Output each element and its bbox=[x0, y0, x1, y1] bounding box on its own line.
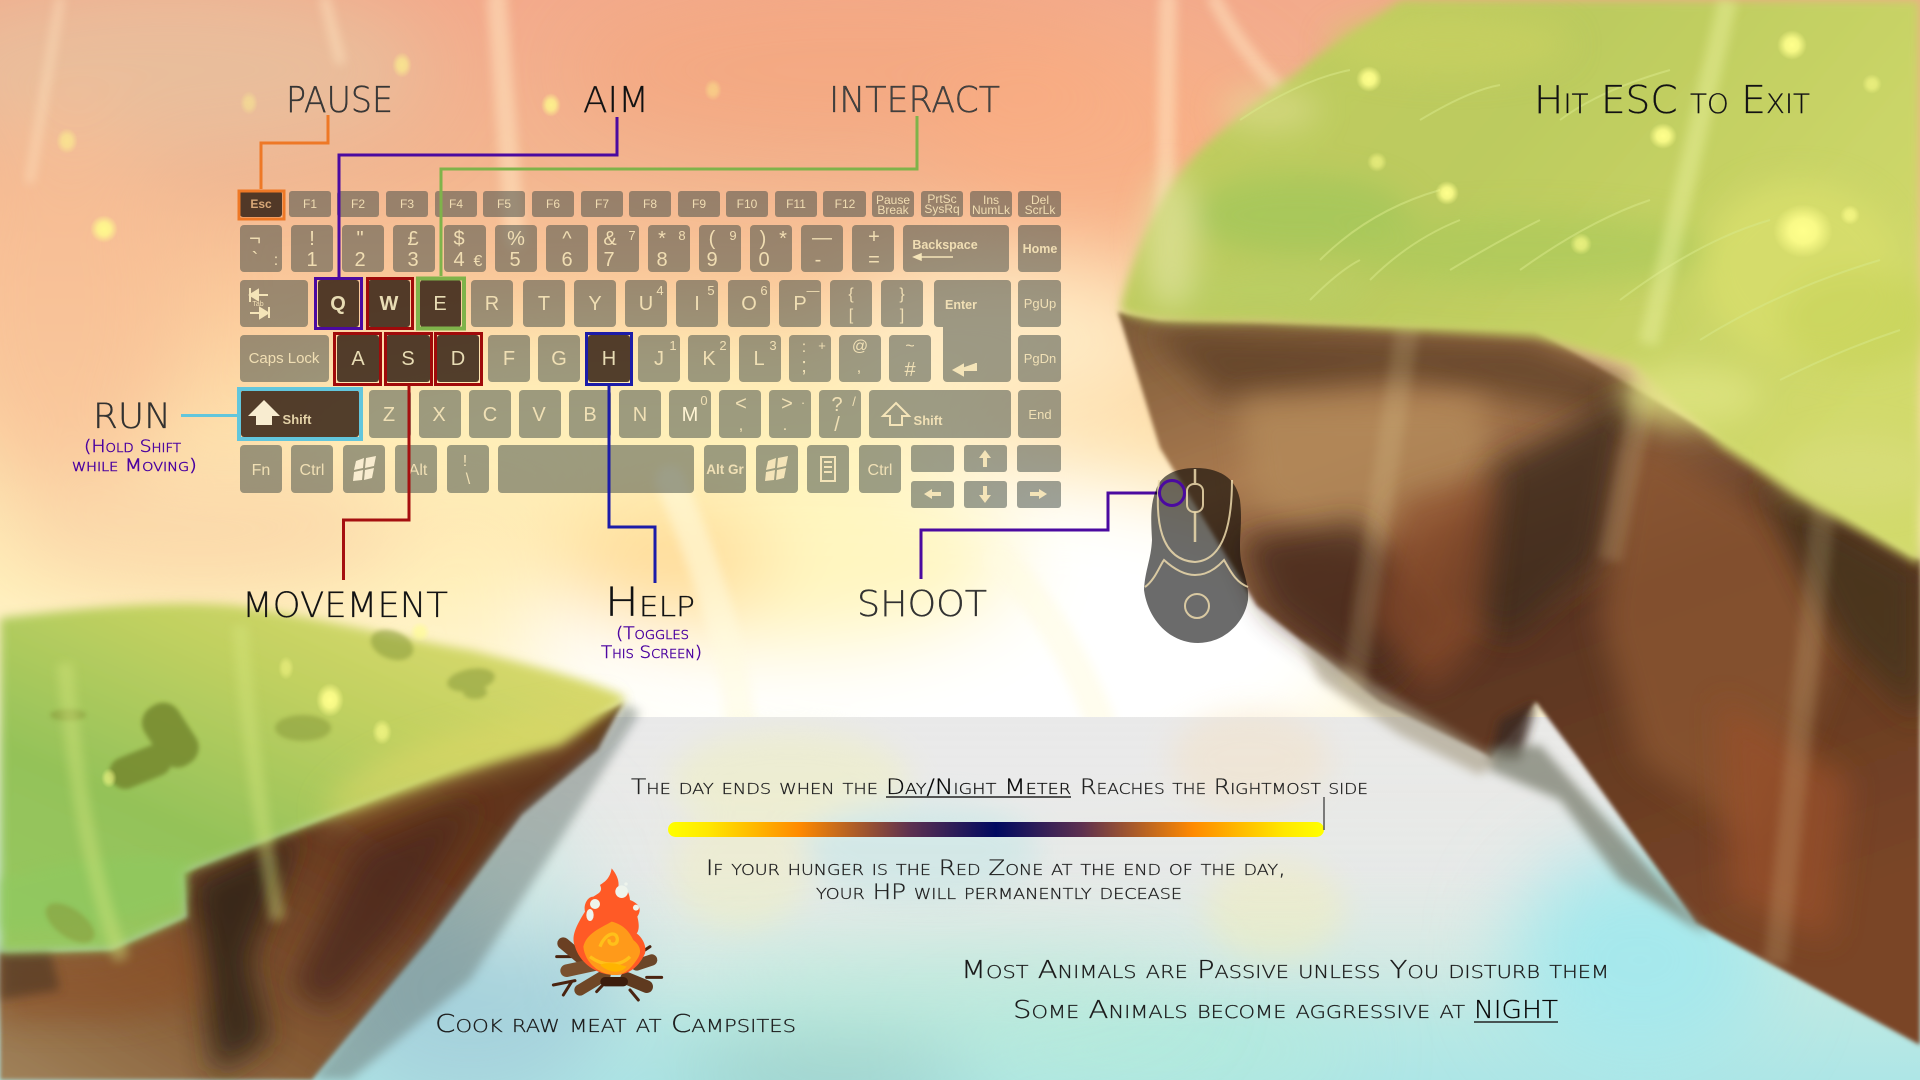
text: day ends line: Reaches the Rightmost side bbox=[1080, 775, 1368, 799]
number key row: : bbox=[274, 252, 278, 269]
QWERTY key row: [ bbox=[849, 307, 854, 324]
ZXCV key row: 0 bbox=[700, 393, 708, 408]
number key row: " bbox=[356, 228, 364, 250]
number key row: Home bbox=[1023, 242, 1057, 256]
ZXCV key row: V bbox=[532, 404, 546, 426]
QWERTY key row: 5 bbox=[707, 283, 715, 298]
label: run note: while Moving) bbox=[72, 456, 197, 476]
connector: movement bbox=[344, 385, 409, 580]
ZXCV key row: . bbox=[783, 417, 787, 434]
ASDF key row: Caps Lock bbox=[249, 350, 320, 367]
function key row: F9 bbox=[692, 197, 706, 211]
QWERTY key row: R bbox=[485, 293, 499, 315]
label: exit hint: Hit ESC to Exit bbox=[1534, 78, 1810, 122]
function key row: PrtSc bbox=[927, 192, 957, 206]
label: run note: (Hold Shift bbox=[84, 437, 182, 457]
ZXCV key row: End bbox=[1028, 407, 1052, 422]
ASDF key row: D bbox=[451, 348, 465, 370]
bottom key row: Fn bbox=[252, 462, 270, 479]
number key row: 4 bbox=[453, 249, 465, 271]
QWERTY key row: 6 bbox=[760, 283, 768, 298]
number key row: % bbox=[507, 228, 525, 250]
highlight: W bbox=[368, 278, 412, 328]
ASDF key row: PgDn bbox=[1024, 351, 1056, 366]
number key row: 3 bbox=[407, 249, 419, 271]
number key row: 7 bbox=[628, 228, 636, 243]
highlight: E bbox=[418, 278, 464, 328]
ASDF key row: 3 bbox=[769, 338, 777, 353]
label: help: Help bbox=[605, 580, 695, 626]
QWERTY key row: PgUp bbox=[1024, 296, 1056, 311]
number key row bbox=[240, 225, 1061, 272]
number key row: * bbox=[658, 228, 666, 250]
ASDF key row: K bbox=[702, 348, 716, 370]
text: animals: Some Animals become aggressive at bbox=[1013, 995, 1465, 1024]
label: interact: INTERACT bbox=[829, 80, 1000, 121]
function key row: F8 bbox=[643, 197, 657, 211]
number key row: 9 bbox=[706, 249, 718, 271]
number key row: + bbox=[868, 226, 880, 248]
bottom key row: Ctrl bbox=[300, 462, 324, 479]
QWERTY key row: — bbox=[806, 283, 820, 298]
function key row: F12 bbox=[835, 197, 856, 211]
function key row: Esc bbox=[250, 197, 272, 211]
text: day ends line: The day ends when the bbox=[631, 775, 878, 799]
highlight: Esc bbox=[239, 191, 284, 219]
bottom key row: Alt Gr bbox=[706, 462, 744, 477]
QWERTY key row: Enter bbox=[945, 298, 977, 312]
number key row: ¬ bbox=[249, 228, 261, 250]
number key row: * bbox=[779, 228, 787, 250]
number key row: & bbox=[603, 228, 617, 250]
function key row: ScrLk bbox=[1025, 203, 1056, 217]
left island cliff bbox=[0, 703, 640, 1080]
connector: aim bbox=[339, 117, 617, 277]
bottom key row: Alt bbox=[409, 462, 428, 479]
number key row: ! bbox=[309, 228, 315, 250]
water tints over panel edges bbox=[320, 810, 1770, 1080]
pale tints in panel bbox=[670, 710, 1345, 960]
function key row: Break bbox=[877, 203, 910, 217]
ASDF key row: G bbox=[551, 348, 567, 370]
bottom key row: Ctrl bbox=[868, 462, 892, 479]
ZXCV key row: < bbox=[735, 393, 747, 415]
number key row: ) bbox=[760, 228, 766, 250]
fireflies bbox=[56, 30, 1882, 788]
keyboard bbox=[240, 191, 1061, 508]
ASDF key row: H bbox=[602, 348, 616, 370]
icon: mouse bbox=[1144, 468, 1248, 643]
QWERTY key row: I bbox=[694, 293, 700, 315]
text: animals: NIGHT bbox=[1474, 995, 1558, 1024]
text: hunger warning: If your hunger is the Red Zone at the end of the day, bbox=[706, 856, 1286, 880]
number key row: 9 bbox=[729, 228, 737, 243]
ZXCV key row bbox=[241, 390, 1061, 438]
number key row: ^ bbox=[562, 228, 572, 250]
function key row: NumLk bbox=[972, 203, 1011, 217]
ASDF key row: A bbox=[351, 348, 365, 370]
number key row: $ bbox=[453, 228, 465, 250]
label: help note: This Screen) bbox=[601, 643, 702, 663]
number key row: 2 bbox=[354, 249, 366, 271]
arrow keys bbox=[911, 445, 1061, 508]
label: pause: PAUSE bbox=[286, 80, 393, 121]
ZXCV key row: B bbox=[583, 404, 597, 426]
function key row: F5 bbox=[497, 197, 511, 211]
label: aim: AIM bbox=[583, 80, 649, 121]
function key row: F6 bbox=[546, 197, 560, 211]
left island grass bbox=[0, 604, 625, 960]
function key row: SysRq bbox=[924, 202, 960, 216]
QWERTY key row: { bbox=[848, 286, 854, 303]
number key row: ( bbox=[709, 228, 716, 250]
connector: run bbox=[181, 414, 237, 417]
ASDF key row: L bbox=[753, 348, 765, 370]
ZXCV key row: / bbox=[852, 394, 856, 409]
label: movement: MOVEMENT bbox=[242, 586, 448, 626]
ZXCV key row: Shift bbox=[283, 412, 312, 427]
ASDF key row: S bbox=[401, 348, 415, 370]
ASDF key row: ~ bbox=[905, 338, 915, 355]
ZXCV key row: > bbox=[781, 393, 793, 415]
QWERTY key row: } bbox=[899, 286, 905, 303]
function key row bbox=[240, 191, 1061, 217]
ASDF key row: @ bbox=[852, 338, 868, 355]
QWERTY key row: E bbox=[433, 293, 447, 315]
ZXCV key row: N bbox=[633, 404, 647, 426]
ZXCV key row: · bbox=[801, 395, 805, 410]
QWERTY key row: W bbox=[380, 293, 399, 315]
ZXCV key row: / bbox=[834, 414, 840, 436]
QWERTY key row: U bbox=[639, 293, 653, 315]
highlight: A bbox=[334, 334, 380, 384]
number key row: - bbox=[815, 249, 821, 271]
highlight: H bbox=[586, 334, 632, 384]
ZXCV key row: , bbox=[739, 417, 743, 434]
function key row: F11 bbox=[786, 197, 806, 211]
ASDF key row: F bbox=[503, 348, 515, 370]
bottom key row bbox=[240, 445, 901, 493]
ASDF key row: 2 bbox=[719, 338, 727, 353]
QWERTY key row: O bbox=[741, 293, 757, 315]
number key row: 1 bbox=[306, 249, 318, 271]
function key row: F1 bbox=[303, 197, 317, 211]
bottom key row: ! bbox=[463, 453, 467, 470]
ASDF key row: J bbox=[654, 348, 664, 370]
ASDF key row: # bbox=[904, 359, 916, 381]
label: help note: (Toggles bbox=[616, 624, 689, 644]
warm haze patches bbox=[0, 0, 1370, 1080]
function key row: F3 bbox=[400, 197, 414, 211]
ASDF key row: , bbox=[857, 359, 861, 376]
text: animals bbox=[961, 955, 1609, 1024]
right island grass bbox=[1120, 0, 1920, 565]
connector: help bbox=[609, 386, 655, 583]
number key row: ` bbox=[252, 249, 258, 271]
ZXCV key row: X bbox=[432, 404, 446, 426]
text: campsite: Cook raw meat at Campsites bbox=[435, 1009, 796, 1038]
number key row: 8 bbox=[678, 228, 686, 243]
connector: pause bbox=[261, 115, 328, 189]
flame bbox=[573, 868, 645, 975]
connector: shoot bbox=[921, 493, 1160, 579]
number key row: £ bbox=[407, 228, 419, 250]
text: hunger warning bbox=[706, 856, 1286, 904]
function key row: F4 bbox=[449, 197, 463, 211]
logs bbox=[553, 943, 662, 1000]
function key row: F7 bbox=[595, 197, 609, 211]
function key row: Ins bbox=[983, 193, 999, 207]
function key row: F10 bbox=[737, 197, 758, 211]
highlight: S bbox=[386, 334, 432, 384]
QWERTY key row: Q bbox=[330, 293, 346, 315]
day/night meter bbox=[668, 797, 1324, 837]
QWERTY key row: ] bbox=[900, 307, 904, 324]
bottom panel overlay bbox=[500, 717, 1650, 1027]
function key row: F2 bbox=[351, 197, 365, 211]
label: run: RUN bbox=[93, 397, 171, 437]
number key row: 8 bbox=[656, 249, 668, 271]
label: shoot: SHOOT bbox=[857, 584, 987, 625]
text: day ends line bbox=[631, 775, 1368, 799]
function key row: Pause bbox=[876, 193, 910, 207]
QWERTY key row: T bbox=[538, 293, 550, 315]
number key row: Backspace bbox=[912, 238, 978, 252]
light streaks in sky bbox=[30, 0, 1290, 720]
right island cliff bbox=[1118, 262, 1920, 1045]
ZXCV key row: Shift bbox=[914, 413, 943, 428]
function key row: Del bbox=[1031, 193, 1049, 207]
text: day ends line: Day/Night Meter bbox=[886, 775, 1071, 799]
highlight: Q bbox=[316, 278, 362, 328]
ZXCV key row: ? bbox=[831, 394, 843, 416]
ASDF key row: 1 bbox=[669, 338, 677, 353]
ZXCV key row: Z bbox=[383, 404, 395, 426]
number key row: 0 bbox=[758, 249, 770, 271]
QWERTY key row: Y bbox=[588, 293, 602, 315]
ZXCV key row: M bbox=[682, 404, 698, 426]
QWERTY key row bbox=[240, 280, 1061, 382]
ASDF key row: : bbox=[802, 339, 806, 356]
highlight: Shift bbox=[239, 389, 361, 439]
ASDF key row: ; bbox=[801, 355, 807, 377]
number key row: — bbox=[812, 227, 832, 249]
label: run note bbox=[72, 437, 197, 476]
number key row: 5 bbox=[509, 249, 521, 271]
number key row: € bbox=[474, 253, 483, 270]
label: help note bbox=[601, 624, 702, 663]
ASDF key row: + bbox=[818, 338, 826, 353]
text: animals: Most Animals are Passive unless You disturb them bbox=[961, 955, 1609, 984]
ZXCV key row: C bbox=[483, 404, 497, 426]
ASDF key row bbox=[240, 335, 1061, 382]
number key row: 7 bbox=[603, 249, 615, 271]
bottom key row: \ bbox=[466, 471, 471, 488]
connector: interact bbox=[441, 116, 917, 276]
QWERTY key row: 4 bbox=[656, 283, 664, 298]
icon: campfire bbox=[553, 868, 662, 1000]
QWERTY key row: P bbox=[793, 293, 807, 315]
QWERTY key row: Tab bbox=[252, 301, 264, 308]
number key row: = bbox=[868, 249, 880, 271]
number key row: 6 bbox=[561, 249, 573, 271]
highlight: D bbox=[436, 334, 482, 384]
text: hunger warning: your HP will permanently decease bbox=[816, 880, 1182, 904]
key highlight boxes bbox=[239, 191, 632, 439]
